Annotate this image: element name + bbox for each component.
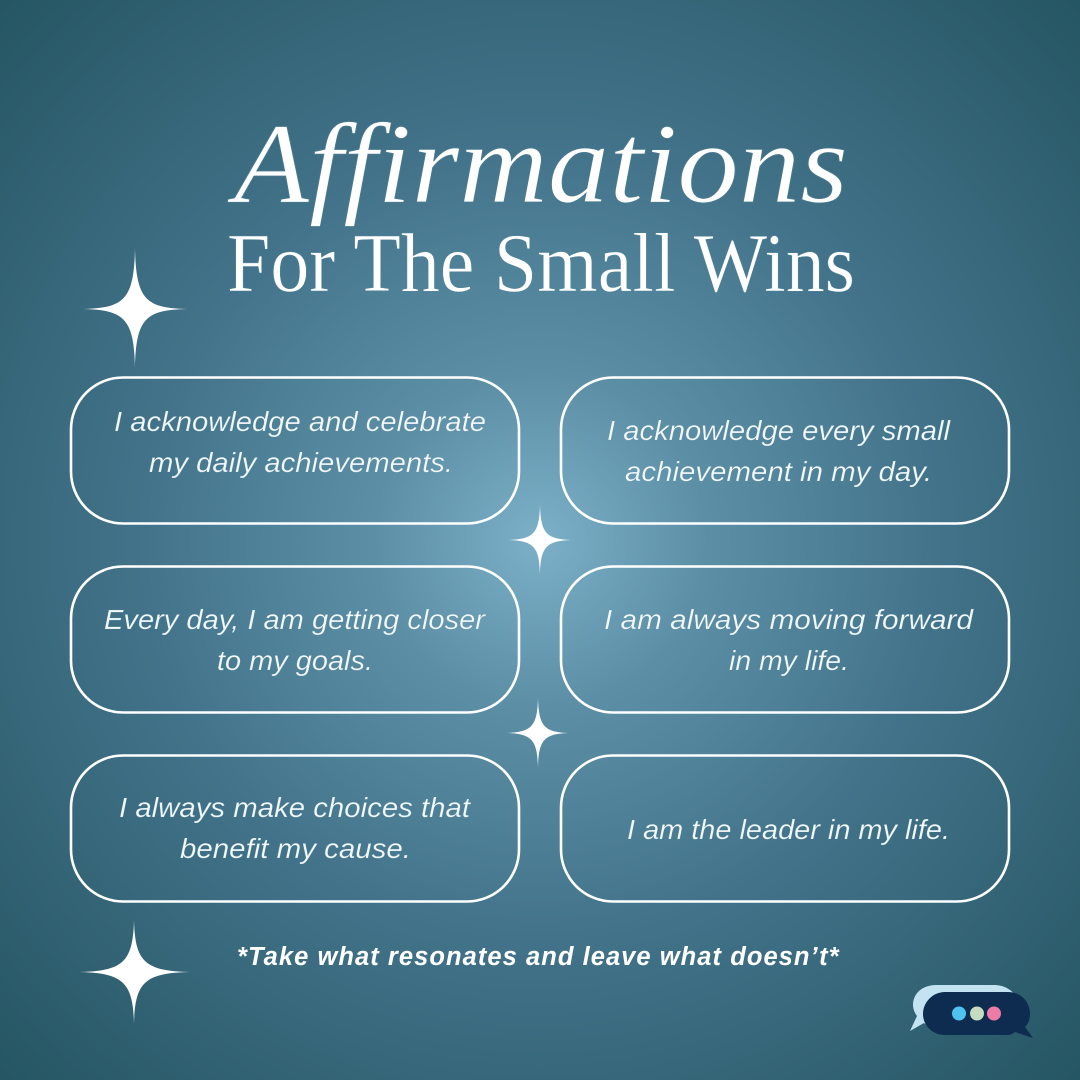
icon: large sparkle bottom left xyxy=(79,920,190,1024)
panel: affirmation 2: achievement in my day. xyxy=(625,456,932,487)
icon: chat bubbles xyxy=(910,985,1033,1038)
panel: affirmation 4: I am always moving forward xyxy=(604,604,975,635)
panel: affirmation 6: I am the leader in my life. xyxy=(627,814,950,845)
panel: affirmation 1: my daily achievements. xyxy=(149,447,453,478)
panel: affirmation 6 xyxy=(561,756,1009,902)
panel: affirmation 2 xyxy=(561,378,1009,524)
panel: affirmation 1: I acknowledge and celebrate xyxy=(114,406,486,437)
panel: affirmation 5: I always make choices that xyxy=(119,792,471,823)
icon: sparkle centre lower xyxy=(507,697,568,768)
panel: affirmation 2: I acknowledge every small xyxy=(607,415,951,446)
panel: affirmation 1 xyxy=(71,378,519,524)
panel: affirmation 4 xyxy=(561,566,1009,712)
panel: affirmation 3: Every day, I am getting closer xyxy=(104,604,487,635)
panel: affirmation 5: benefit my cause. xyxy=(180,833,411,864)
icon: sparkle centre upper xyxy=(509,504,571,575)
panel: affirmation 5 xyxy=(71,756,519,902)
title xyxy=(226,100,855,310)
icon: large sparkle top left xyxy=(83,248,187,368)
panel: affirmation 4: in my life. xyxy=(729,645,849,676)
panel: affirmation 3 xyxy=(71,566,519,712)
panel: affirmation 3: to my goals. xyxy=(217,645,373,676)
footer note: *Take what resonates and leave what doesn’t* xyxy=(237,943,840,971)
title: script line: Affirmations xyxy=(226,100,848,227)
title: subtitle line: For The Small Wins xyxy=(227,217,855,310)
